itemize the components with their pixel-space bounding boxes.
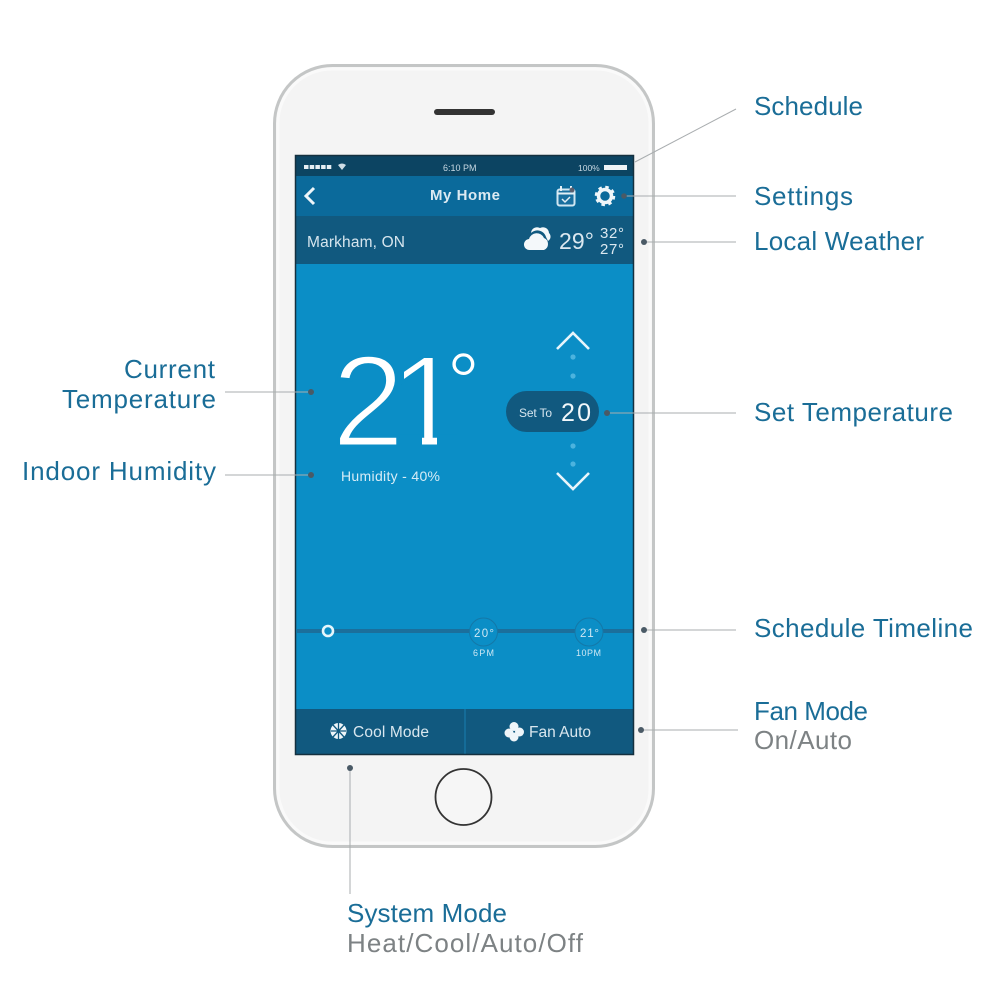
set temperature pill <box>506 391 599 432</box>
current temperature <box>340 353 474 444</box>
callout: fan mode: On/Auto <box>754 725 852 755</box>
home button <box>436 769 492 825</box>
up chevron <box>557 333 589 349</box>
phone screen <box>295 155 634 755</box>
icon: fan <box>504 722 524 742</box>
callout: schedule <box>635 91 863 162</box>
schedule timeline: 21° <box>580 628 599 640</box>
callout: schedule: Schedule <box>754 91 863 121</box>
humidity text: Humidity - 40% <box>341 468 440 484</box>
callout: schedule timeline <box>641 613 973 643</box>
set temperature pill: 20 <box>561 399 591 427</box>
local weather bar <box>295 216 634 264</box>
dots above <box>570 354 576 379</box>
callout: current temperature: Current <box>124 354 216 384</box>
fan auto label: Fan Auto <box>529 724 591 741</box>
down chevron <box>557 473 589 489</box>
callout: set temperature <box>604 397 953 427</box>
callout: schedule timeline: Schedule Timeline <box>754 613 973 643</box>
high temperature: 32° <box>600 225 624 242</box>
current temperature: ° <box>447 337 480 428</box>
callout: local weather <box>641 226 924 256</box>
callout: system mode <box>347 765 584 958</box>
callout: settings: Settings <box>754 181 853 211</box>
location: Markham, ON <box>307 234 405 251</box>
schedule timeline: 20° <box>474 628 494 640</box>
screen title: My Home <box>430 187 500 204</box>
callout: fan mode <box>638 696 868 755</box>
current outdoor temperature: 29° <box>559 228 594 254</box>
phone speaker <box>434 109 495 115</box>
callout: settings <box>621 181 853 211</box>
icon: cloud <box>524 227 551 250</box>
bottom mode bar <box>295 709 634 755</box>
callout: local weather: Local Weather <box>754 226 924 256</box>
phone body <box>274 66 654 846</box>
back arrow <box>306 188 314 204</box>
dots below <box>570 443 576 467</box>
current temperature: 2 <box>332 328 404 474</box>
schedule timeline: 6PM <box>473 648 494 658</box>
set temperature pill: Set To <box>519 406 552 420</box>
callout: fan mode: Fan Mode <box>754 696 868 726</box>
current temperature: 1 <box>390 328 462 474</box>
callout: indoor humidity <box>22 456 314 486</box>
schedule timeline: 10PM <box>576 648 601 658</box>
status bar: 100% <box>578 163 600 173</box>
status bar <box>295 155 634 176</box>
callout: current temperature <box>62 354 314 414</box>
callout: indoor humidity: Indoor Humidity <box>22 456 216 486</box>
callout: system mode: Heat/Cool/Auto/Off <box>347 928 584 958</box>
schedule timeline <box>297 618 634 658</box>
icon: settings gear <box>596 187 614 205</box>
callout: current temperature: Temperature <box>62 384 216 414</box>
callout: system mode: System Mode <box>347 898 507 928</box>
low temperature: 27° <box>600 241 624 258</box>
callout: set temperature: Set Temperature <box>754 397 953 427</box>
icon: calendar <box>557 186 575 206</box>
status bar: 6:10 PM <box>443 163 477 173</box>
cool mode label: Cool Mode <box>353 724 429 741</box>
navigation bar <box>295 176 634 216</box>
icon: snowflake <box>330 723 346 739</box>
